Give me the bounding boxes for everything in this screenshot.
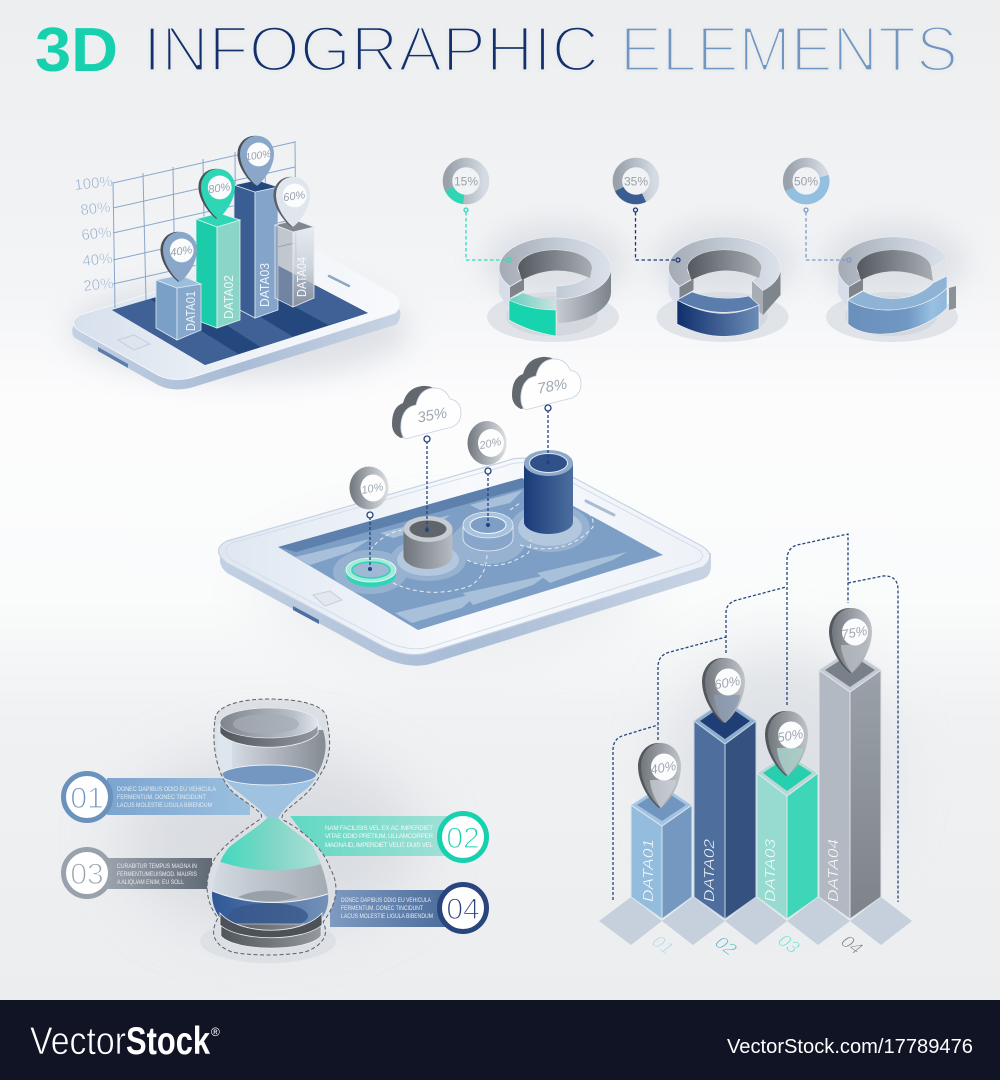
hourglass dashed outline: [207, 699, 336, 955]
hourglass floor shadow: [200, 919, 336, 963]
badge 01: 01: [70, 782, 104, 815]
strip 01: DONEC DAPIBUS ODIO EU VEHICULA: [117, 786, 217, 793]
connector: [464, 208, 511, 262]
strip 04: DONEC DAPIBUS ODIO EU VEHICULA: [341, 897, 432, 904]
axis labels: 02: [710, 933, 743, 958]
pin 80%: [198, 169, 235, 219]
ring left wall: [668, 268, 680, 308]
panel: 3D ring 35%: [617, 162, 796, 342]
axis labels: [647, 931, 869, 958]
pin 40%: [160, 232, 197, 282]
ring segment 35%: [677, 292, 759, 336]
strip 03: FERMENTUMEUISMOD. MAURIS: [117, 871, 197, 878]
bar DATA03: DATA03: [257, 263, 272, 307]
bar DATA01: [156, 275, 201, 340]
strip 01: [107, 778, 250, 815]
bar DATA04: [819, 650, 881, 919]
strip 01: LACUS MOLESTIE LIGULA BIBENDUM: [117, 802, 212, 809]
cloud 78%: [512, 357, 581, 410]
tablet speaker slot: [586, 501, 614, 515]
ring base shadow: [826, 292, 958, 342]
ring base shadow: [487, 292, 619, 342]
pin 75%: [829, 608, 872, 673]
connector lines: [367, 405, 551, 570]
strip 03: CURABITUR TEMPUS MAGNA IN: [117, 863, 197, 870]
bar DATA02: DATA02: [221, 275, 236, 319]
disc 10%: [350, 466, 388, 510]
ring outer wall: [763, 268, 780, 315]
badge 04: 04: [446, 893, 480, 926]
pin 40%: 40%: [649, 758, 677, 777]
pin 50%: 50%: [776, 726, 804, 745]
ring 20%: [463, 512, 513, 551]
phone screen: [112, 263, 368, 365]
footer logo: Vector: [30, 1020, 126, 1063]
phone speaker slot: [329, 276, 349, 286]
ring base shadow: [656, 292, 788, 342]
ring top surface: [499, 237, 611, 299]
donut gauge 15%: 15%: [454, 174, 478, 188]
bar DATA03: [757, 753, 818, 919]
bar DATA02: [196, 213, 240, 328]
title: ELEMENTS: ELEMENTS: [620, 13, 958, 85]
title: INFOGRAPHIC: INFOGRAPHIC: [143, 13, 599, 85]
donut gauge 35%: 35%: [624, 174, 648, 188]
tablet home button: [313, 591, 342, 606]
soft background shadows: [120, 530, 890, 930]
ring segment 15%: [509, 293, 556, 336]
donut gauge 15%: [448, 162, 484, 200]
bar DATA01: [631, 785, 692, 919]
hourglass lower bulb: [212, 818, 328, 924]
pin 60%: [273, 177, 310, 227]
tablet side: [220, 549, 711, 666]
connector: [804, 208, 851, 262]
ring outer wall: [556, 268, 611, 323]
pin 75%: 75%: [840, 623, 868, 642]
ring inner wall: [518, 250, 592, 280]
bar DATA04: DATA04: [825, 839, 842, 902]
strip 03: A ALIQUAM ENIM, EU SOLL: [117, 879, 184, 886]
hourglass upper bulb: [216, 725, 326, 818]
badge 03: 03: [70, 858, 104, 891]
badge 01: [64, 774, 110, 820]
dashed connectors: [613, 534, 898, 902]
ring top surface: [669, 237, 781, 290]
cylinder 35%: [404, 516, 452, 569]
chart axis labels: 20%: [83, 275, 114, 295]
cloud 78%: 78%: [536, 376, 568, 398]
ring inner wall: [688, 250, 762, 280]
phone body side: [72, 258, 400, 389]
bar DATA03: DATA03: [762, 838, 779, 902]
panel: 3D ring 15%: [448, 162, 627, 342]
donut gauge 35%: [617, 162, 654, 200]
footer logo: Stock: [126, 1020, 210, 1063]
phone shadow: [70, 280, 410, 380]
pin 50%: [765, 711, 808, 776]
pin 100%: [237, 136, 274, 186]
pin 60%: 60%: [713, 673, 741, 692]
disc 20%: 20%: [477, 436, 503, 452]
cloud 35%: 35%: [416, 405, 448, 427]
disc 20%: [468, 421, 506, 465]
chart grid: [113, 141, 296, 308]
base diamonds: [599, 897, 912, 945]
footer logo: ®: [211, 1025, 220, 1039]
phone home button: [118, 335, 150, 350]
strip 02: MAGNA ID, IMPERDIET VELIT. DUIS VEL: [325, 842, 433, 849]
bar DATA01: DATA01: [183, 291, 198, 331]
strip 02: [290, 816, 450, 856]
chart axis labels: 100%: [74, 173, 114, 194]
ring left wall: [499, 268, 510, 308]
bar DATA02: DATA02: [701, 838, 718, 902]
panel: isometric bar chart: [599, 534, 912, 958]
strip 04: LACUS MOLESTIE LIGULA BIBENDUM: [341, 913, 433, 920]
donut gauge 50%: [788, 162, 825, 200]
axis labels: 01: [647, 932, 680, 957]
hourglass bottom cap: [220, 913, 322, 948]
ring cut face: [849, 279, 863, 298]
ring cut faces: [680, 279, 694, 298]
cloud 35%: [392, 386, 461, 438]
strip 02: NAM FACILISIS VEL EX AC IMPERDIET: [325, 825, 433, 832]
bar DATA04: [275, 220, 314, 307]
tablet top face: [218, 458, 710, 655]
footer url: VectorStock.com/17789476: [727, 1036, 973, 1058]
badge 03: [64, 850, 110, 896]
panel: tablet with cylinders: [218, 357, 711, 666]
ring 10%: [346, 558, 396, 587]
tablet screen: [278, 478, 663, 630]
donut gauge 50%: 50%: [794, 174, 818, 188]
connector: [634, 208, 680, 262]
strip 03: [107, 858, 212, 889]
strip 04: FERMENTUM. DONEC TINCIDUNT: [341, 905, 423, 912]
ring small block: [949, 286, 956, 310]
chart axis labels: [74, 173, 114, 295]
pin 100%: 100%: [245, 149, 272, 163]
panel: smartphone bar chart: [70, 136, 410, 389]
ring inner wall: [857, 250, 933, 281]
bar DATA03: [234, 180, 278, 318]
bar DATA04: DATA04: [294, 257, 309, 297]
bar DATA02: [694, 700, 756, 919]
hourglass top cap: [220, 708, 318, 747]
axis labels: 04: [836, 932, 869, 957]
pin 60%: [702, 658, 745, 723]
badge 02: [440, 814, 486, 860]
pin 40%: 40%: [169, 244, 193, 259]
phone side button: [98, 347, 128, 368]
tablet inner bezel line: [226, 463, 703, 649]
pin 40%: [638, 743, 681, 808]
pin 80%: 80%: [207, 181, 231, 196]
bar DATA01: DATA01: [640, 839, 657, 902]
chart axis labels: 80%: [80, 199, 111, 219]
strip 04: [330, 890, 450, 927]
footer logo: [30, 1020, 220, 1063]
ring top surface: [838, 237, 947, 286]
cylinder 78%: [524, 450, 573, 534]
pin 60%: 60%: [282, 189, 306, 204]
phone top face: [73, 248, 400, 379]
chart axis labels: 60%: [81, 224, 112, 244]
panel: hourglass infographic: [64, 699, 486, 963]
ring cut face: [510, 279, 524, 298]
title: [35, 13, 958, 85]
axis labels: 03: [773, 931, 806, 956]
ring left wall: [838, 268, 849, 308]
strip 02: VITAE ODIO PRETIUM, ULLAMCORPER: [325, 833, 433, 840]
ring segment 50%: [848, 276, 947, 334]
strip 01: FERMENTUM. DONEC TINCIDUNT: [117, 794, 206, 801]
badge 02: 02: [446, 822, 480, 855]
disc 10%: 10%: [361, 481, 385, 497]
panel: 3D ring 50%: [788, 162, 966, 342]
chart axis labels: 40%: [82, 250, 113, 270]
badge 04: [440, 884, 486, 932]
footer bar: [0, 1000, 1000, 1080]
tablet side button: [293, 606, 319, 624]
title: 3D: 3D: [35, 16, 118, 85]
